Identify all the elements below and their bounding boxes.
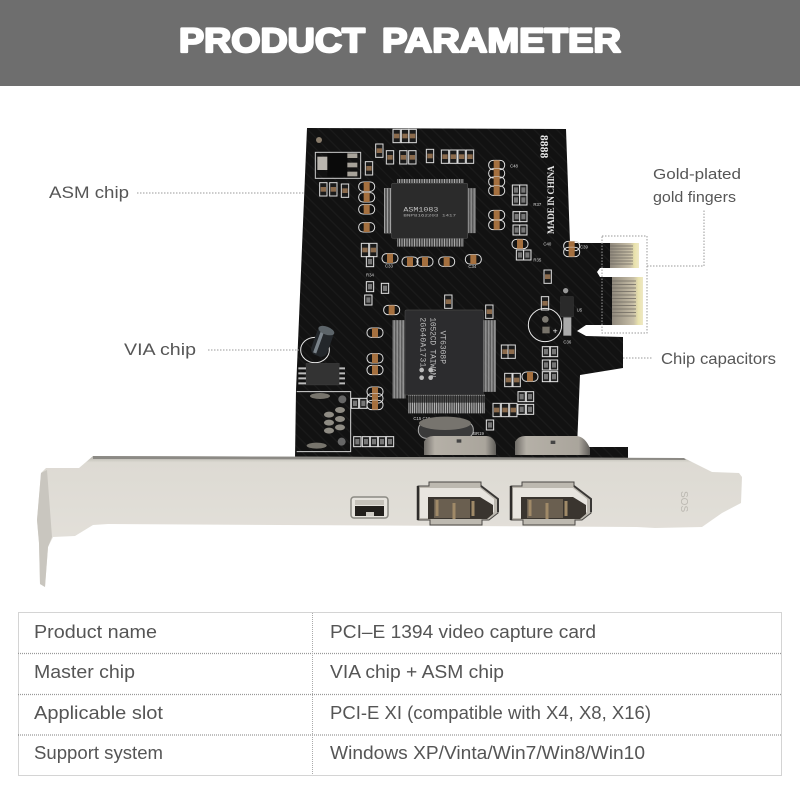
diode bbox=[561, 288, 573, 336]
row: support system: Support system bbox=[34, 743, 163, 763]
board components, drawn in zoomed coordinates bbox=[297, 129, 590, 455]
circuit board bbox=[295, 128, 643, 458]
row: master chip: VIA chip + ASM chip bbox=[330, 662, 504, 682]
component labels: C15 C16 bbox=[413, 416, 431, 421]
component labels: C48 bbox=[510, 163, 519, 168]
mini FireWire port bbox=[351, 497, 388, 518]
row: support system bbox=[34, 743, 645, 763]
SMD capacitors bbox=[359, 160, 580, 410]
title: PARAMETER bbox=[382, 22, 621, 60]
silkscreen capacitor circle bbox=[528, 308, 562, 342]
row: product name: Product name bbox=[34, 622, 157, 642]
callout: gold fingers: Gold-plated bbox=[653, 166, 741, 183]
rear connector housings bbox=[424, 436, 590, 455]
FireWire port 2 bbox=[511, 482, 591, 525]
parameter table bbox=[18, 612, 782, 776]
component labels: R35 bbox=[533, 258, 542, 263]
ASM chip: BNP8162203 1417 bbox=[403, 214, 457, 218]
row: product name bbox=[34, 622, 596, 642]
product photo: capture card bbox=[37, 128, 742, 587]
row: product name: PCI–E 1394 video capture card bbox=[330, 622, 596, 642]
component labels: C40 bbox=[543, 241, 552, 246]
VIA chip: 2G640A1731 bbox=[418, 317, 427, 368]
component labels: R37 bbox=[533, 202, 542, 207]
metal bracket: SOS bbox=[678, 491, 689, 512]
title banner bbox=[0, 0, 800, 86]
metal bracket bbox=[37, 456, 742, 587]
SMD resistors bbox=[320, 129, 551, 417]
title: PRODUCT bbox=[179, 22, 365, 60]
row: master chip bbox=[34, 662, 504, 682]
VIA chip: VT6308P bbox=[438, 331, 447, 364]
small SOIC chip bbox=[298, 363, 345, 385]
lower gold fingers bbox=[612, 277, 643, 325]
top gold fingers bbox=[610, 243, 639, 268]
ASM chip: ASM1083 bbox=[403, 207, 439, 214]
board markings: MADE IN CHINA bbox=[546, 165, 556, 234]
component labels: C36 bbox=[563, 339, 572, 344]
callout: chip capacitors: Chip capacitors bbox=[661, 351, 776, 368]
electrolytic capacitor bbox=[301, 324, 336, 363]
row: support system: Windows XP/Vinta/Win7/Win8/Win10 bbox=[330, 743, 645, 763]
component labels bbox=[366, 163, 589, 436]
callout: ASM chip: ASM chip bbox=[49, 183, 129, 202]
VIA chip bbox=[393, 310, 496, 404]
callout: gold fingers bbox=[602, 166, 741, 333]
component labels: C34 bbox=[468, 264, 477, 269]
silkscreen port outline bbox=[297, 392, 351, 452]
row: master chip: Master chip bbox=[34, 662, 135, 682]
callout: VIA chip: VIA chip bbox=[124, 340, 196, 359]
component labels: C39 bbox=[580, 244, 589, 249]
board markings bbox=[538, 135, 556, 234]
component labels: C33 bbox=[385, 263, 394, 268]
board markings: 8888 bbox=[538, 135, 550, 159]
silkscreen capacitor circle: + bbox=[553, 325, 558, 335]
FireWire port 1 bbox=[418, 482, 498, 525]
row: applicable slot bbox=[34, 703, 651, 723]
resistor arrays bbox=[351, 185, 558, 447]
component labels: U5 bbox=[577, 308, 583, 313]
VIA chip: 1052CD TAIWAN bbox=[428, 317, 437, 378]
row: applicable slot: Applicable slot bbox=[34, 703, 163, 723]
row: applicable slot: PCI-E XI (compatible with X4, X8, X16) bbox=[330, 703, 651, 723]
ASM chip bbox=[384, 181, 476, 242]
component labels: CBR19 bbox=[470, 431, 485, 436]
component labels: R34 bbox=[366, 273, 375, 278]
callout: gold fingers: gold fingers bbox=[653, 189, 736, 206]
crystal bbox=[418, 417, 473, 438]
voltage regulator bbox=[315, 152, 361, 178]
